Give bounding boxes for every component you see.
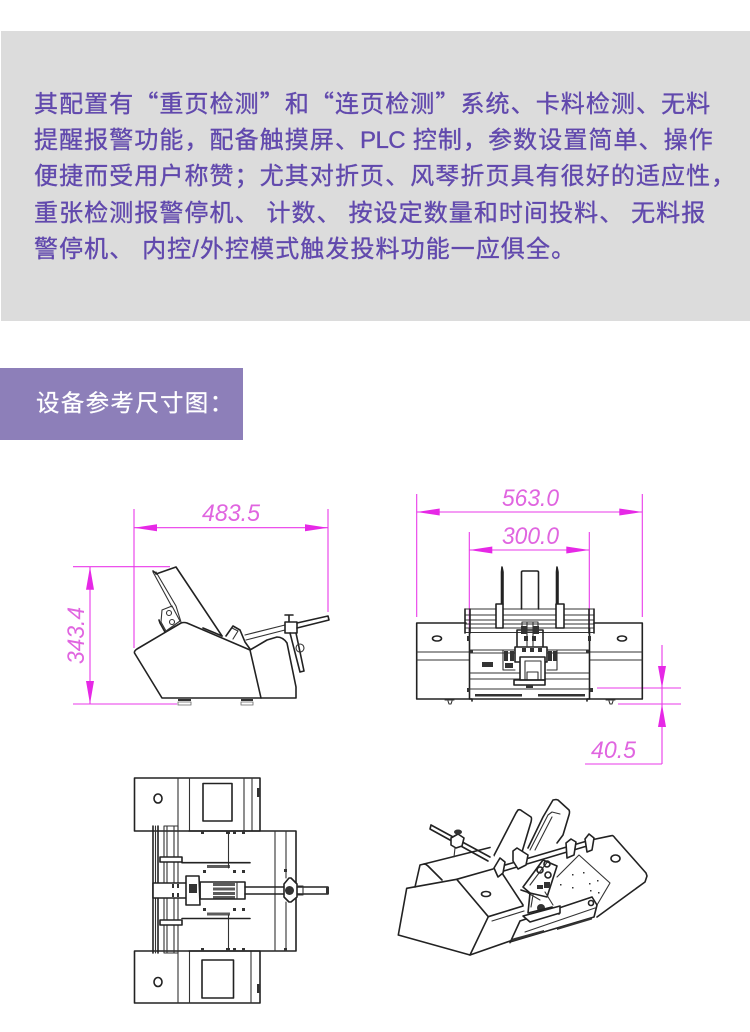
dimension: width 563.0 [417,485,642,617]
text block: product description: 便捷而受用户称赞；尤其对折页、风琴折页具有很好的适应性， [34,163,736,190]
cross rail and clamps [494,834,594,877]
dimension: height 40.5: 40.5 [591,737,637,764]
handle rod and knob [430,825,490,861]
side plate [557,855,610,917]
text block: product description: 其配置有“重页检测”和“连页检测”系统、卡料检测、无料 [34,84,711,119]
upper side panel [134,778,260,831]
panel: product description [1,31,750,321]
handle rod and knob [245,878,329,902]
text block: product description: 警停机、 内控/外控模式触发投料功能一应俱全。 [34,236,576,263]
right end housing [591,836,647,917]
drawing: front view [417,485,681,764]
dimension: width 300.0 [469,523,589,633]
text block: product description [34,84,736,263]
dimension: height 343.4 [63,567,177,704]
machine side profile [134,567,329,705]
text block: product description: 重张检测报警停机、 计数、 按设定数量和时间投料、 无料报 [34,200,706,227]
dimension: width 300.0: 300.0 [502,523,560,550]
dimension: height 343.4: 343.4 [63,607,90,664]
lower side panel [134,951,260,1003]
drawing: isometric view [398,800,647,955]
trays [488,800,570,880]
drawing: side view [63,500,329,705]
dimension: width 563.0: 563.0 [502,485,560,512]
machine front elevation [417,567,642,704]
dimension: height 40.5 [585,645,681,764]
dimension: width 483.5 [134,500,328,648]
dimension: width 483.5: 483.5 [202,500,261,527]
feed bed [510,897,597,943]
centre mechanism [521,860,560,922]
left end housing [398,848,524,955]
drawing: top view [134,778,329,1003]
heading: equipment dimension drawing: 设备参考尺寸图： [36,390,234,416]
heading: equipment dimension drawing [0,368,243,440]
centre frame [153,826,296,953]
text block: product description: 提醒报警功能，配备触摸屏、PLC 控制，参数设置简单、操作 [34,127,714,154]
